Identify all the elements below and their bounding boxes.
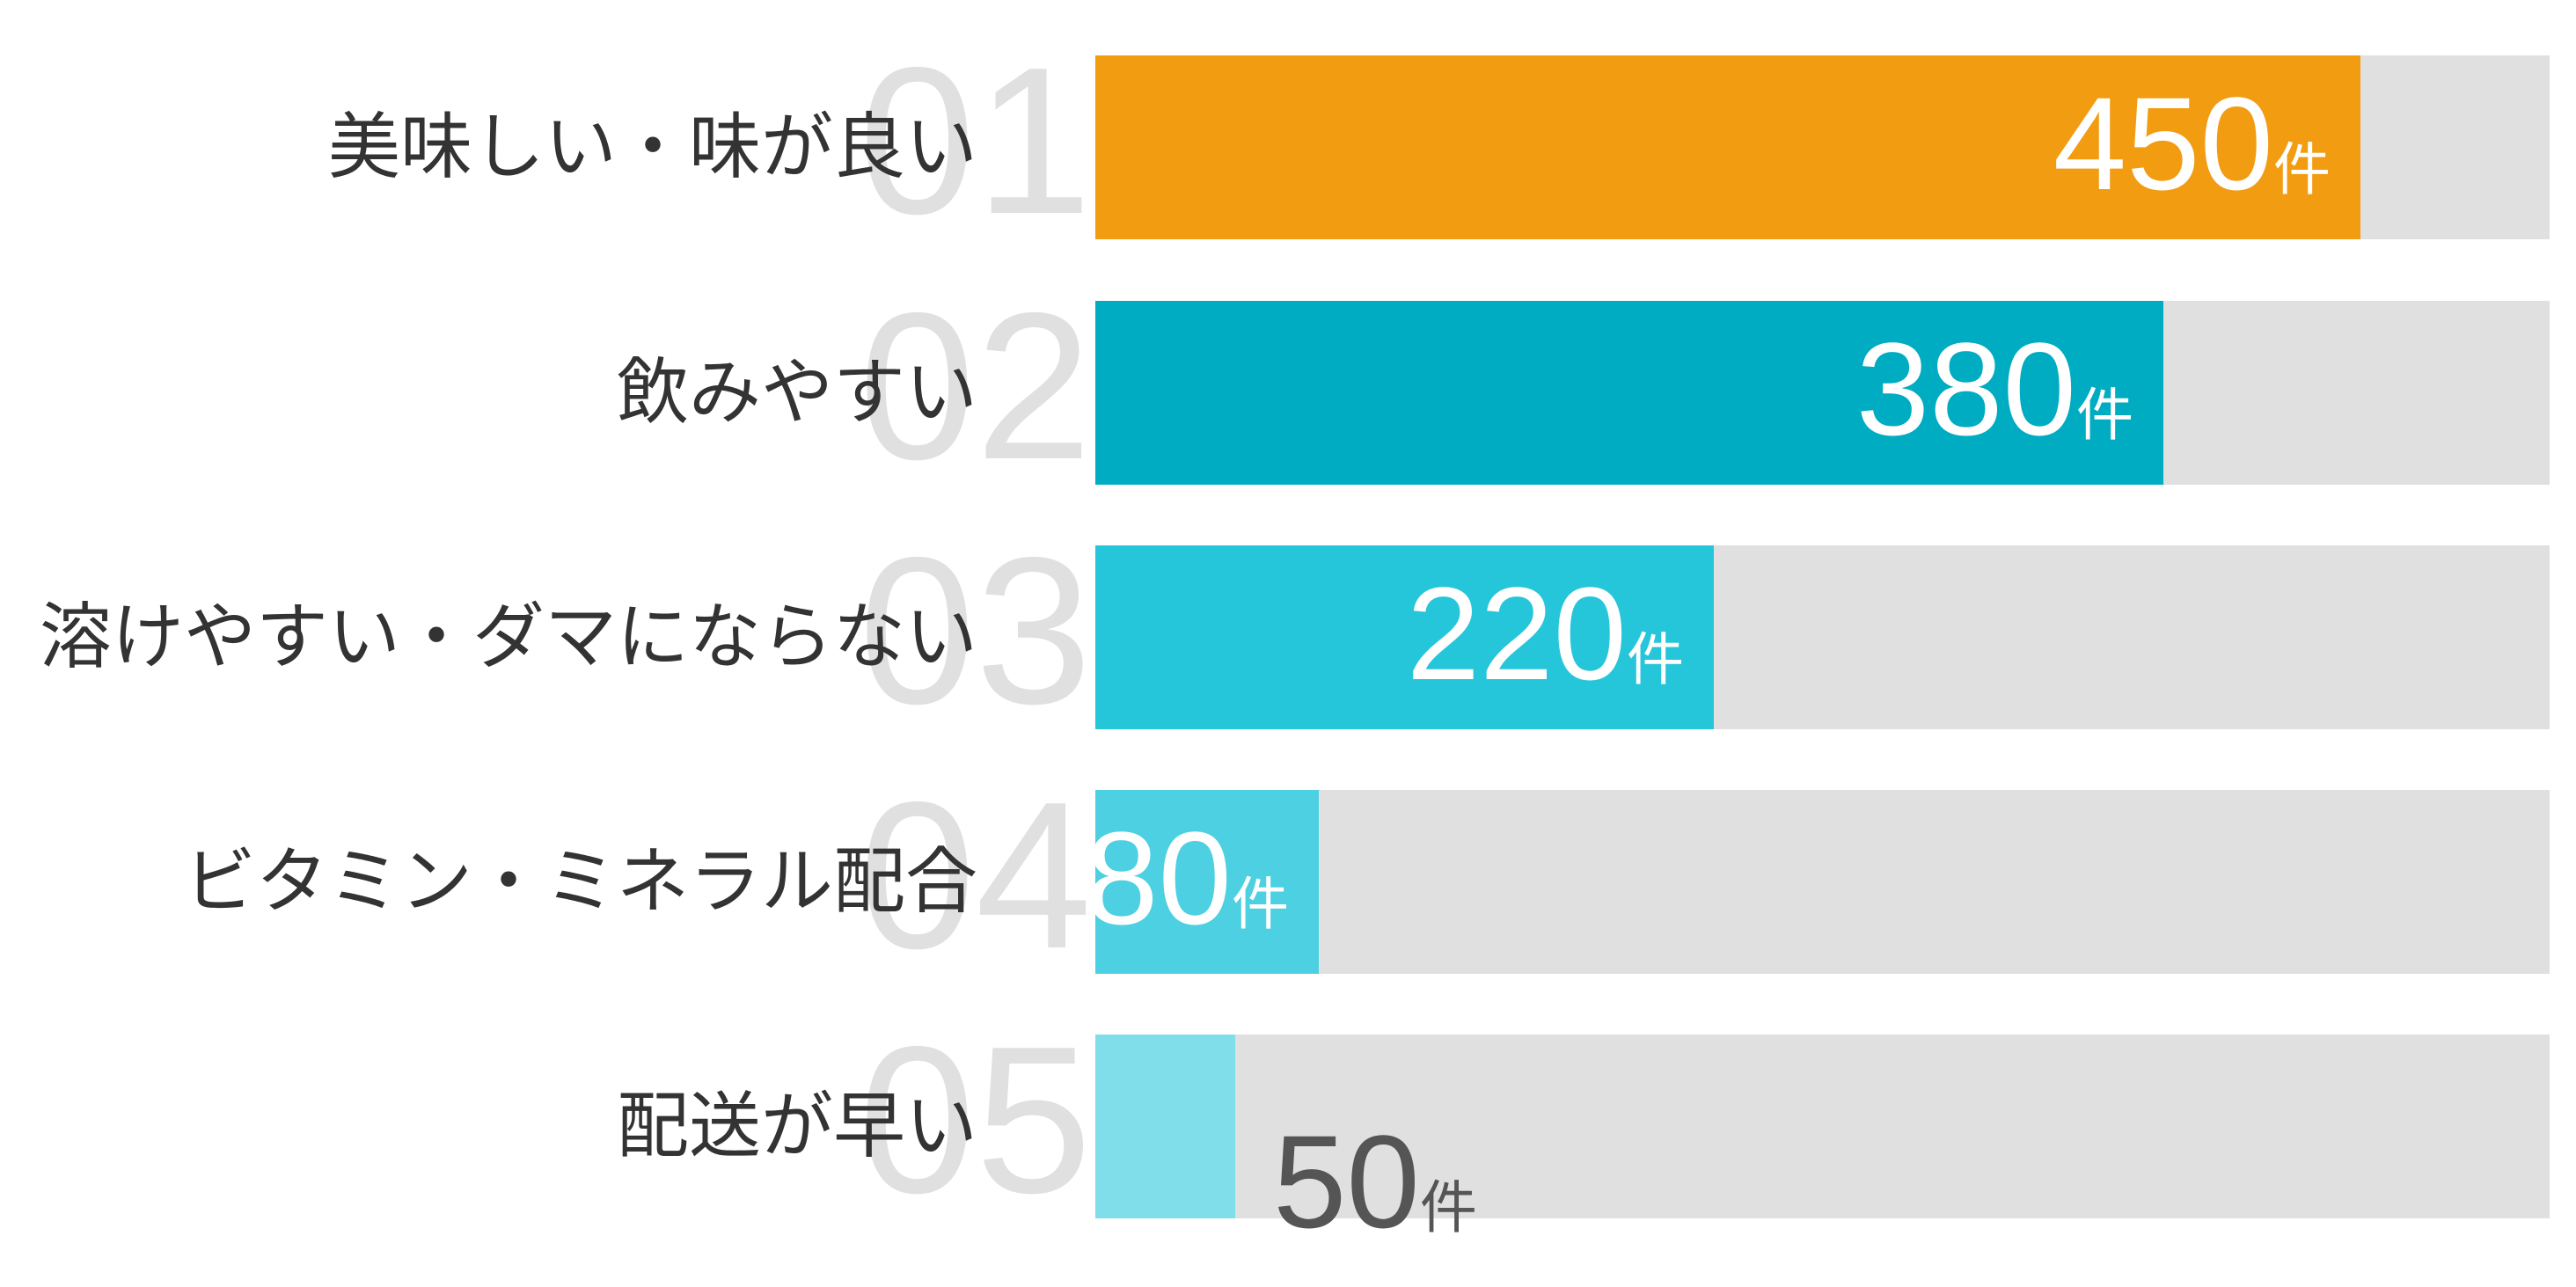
label 5: 配送が早い (617, 1086, 977, 1166)
row 4 (184, 759, 2550, 992)
value 5 outside bar: 50件 (1273, 1108, 1477, 1255)
label 4: ビタミン・ミネラル配合 (184, 842, 977, 922)
rank number 04: 04 (859, 759, 1092, 992)
bar 3 track: 220件 (1407, 559, 1684, 707)
bar 2 track: 380件 (1856, 315, 2133, 463)
rank number 05: 05 (859, 1004, 1092, 1237)
rank number 02: 02 (859, 270, 1092, 503)
bar 1 track (1095, 55, 2550, 239)
bar 5 track (1095, 1035, 2550, 1218)
row 5 (617, 1004, 2550, 1237)
label 1: 美味しい・味が良い (328, 107, 977, 187)
row 1 (328, 25, 2550, 258)
row 3 (40, 515, 2550, 748)
bar 1 track: 450件 (2053, 69, 2331, 217)
bar 4 track (1095, 790, 2550, 974)
rank number 01: 01 (859, 25, 1092, 258)
bar 3 track (1095, 545, 2550, 729)
label 3: 溶けやすい・ダマにならない (40, 597, 977, 677)
bar 2 track (1095, 301, 2550, 485)
label 2: 飲みやすい (617, 353, 977, 433)
rank number 03: 03 (859, 515, 1092, 748)
row 2 (617, 270, 2550, 503)
